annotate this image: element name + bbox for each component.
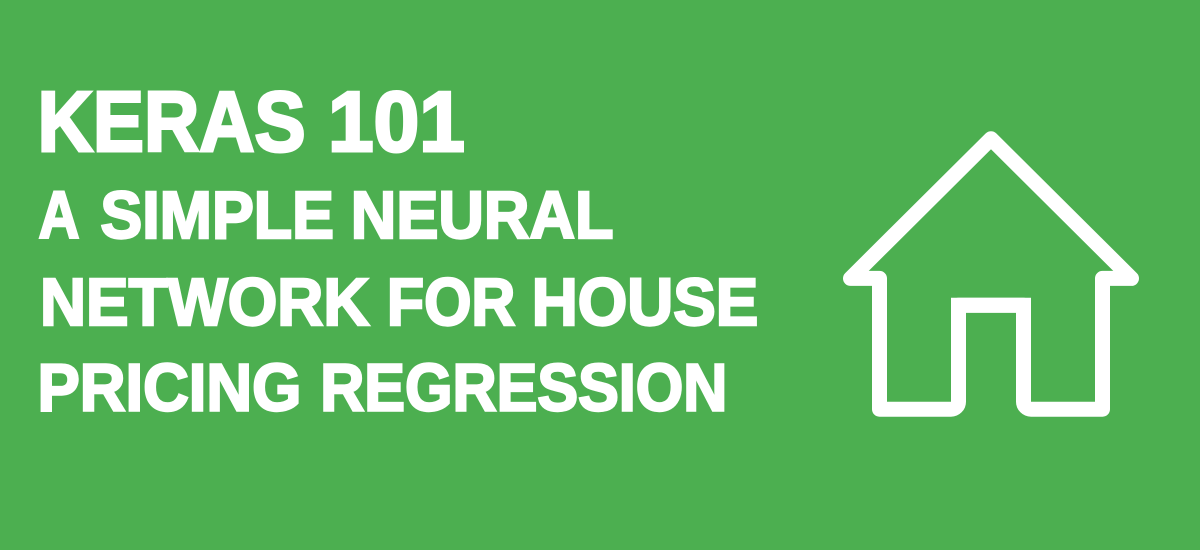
subtitle line 2: HOUSE: [532, 265, 758, 340]
title block: [38, 75, 758, 425]
heading: Keras 101: 101: [328, 75, 465, 170]
heading: Keras 101: [38, 75, 465, 170]
subtitle line 3: REGRESSION: [320, 350, 727, 426]
subtitle line 1: SIMPLE: [100, 178, 334, 253]
heading: Keras 101: KERAS: [38, 75, 306, 170]
subtitle line 2: FOR: [387, 265, 515, 340]
icon: house: [850, 139, 1132, 409]
subtitle line 3: [38, 350, 727, 426]
subtitle line 1: NEURAL: [351, 178, 614, 253]
subtitle line 3: PRICING: [38, 350, 301, 426]
subtitle line 1: A: [38, 178, 80, 253]
subtitle line 2: [40, 265, 758, 340]
subtitle line 2: NETWORK: [40, 265, 369, 340]
subtitle line 1: [38, 178, 614, 253]
